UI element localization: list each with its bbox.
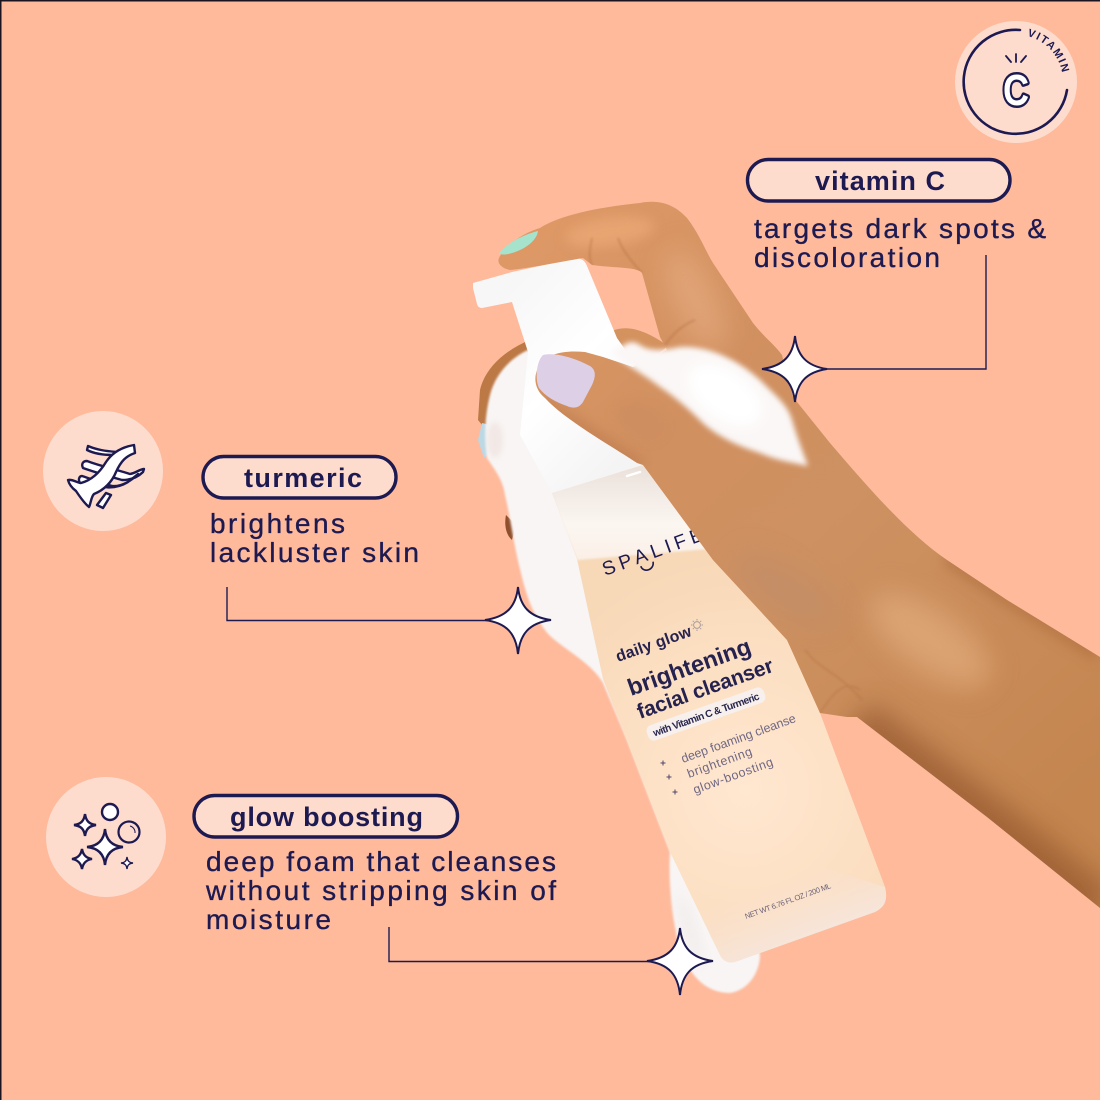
- connector line: turmeric: [227, 587, 490, 620]
- description: vitamin C: [754, 213, 1046, 273]
- glow boosting icon: [46, 777, 166, 897]
- label: facial cleanser: facial cleanser: [634, 654, 776, 724]
- foam inside bottle top: [552, 465, 706, 561]
- vitamin C badge icon: [955, 21, 1077, 143]
- badge label: vitamin: VITAMIN: [1030, 28, 1070, 72]
- pump: [473, 258, 643, 493]
- description: turmeric: [210, 508, 419, 568]
- turmeric icon: [43, 411, 163, 531]
- benefit list on bottle: [660, 711, 798, 797]
- sparkle marker: glow boosting: [647, 928, 713, 995]
- label: brightening: brightening: [624, 633, 754, 701]
- description: vitamin C: targets dark spots &: [754, 213, 1046, 244]
- foam on back of hand: [612, 342, 808, 466]
- callout: glow boosting: [194, 796, 556, 935]
- brand logo: SPALIFE: SPALIFE: [599, 524, 706, 581]
- net weight text: NET WT 6.76 FL OZ / 200 ML: [744, 881, 832, 921]
- description: glow boosting: without stripping skin of: [205, 875, 556, 906]
- pill heading: vitamin C: vitamin C: [815, 166, 945, 196]
- fingers behind the bottle: [478, 328, 668, 540]
- connector line: glow boosting: [389, 927, 655, 962]
- callout: turmeric: [203, 456, 419, 568]
- hand and arm: [498, 202, 1100, 910]
- sun icon: [691, 619, 703, 631]
- description: glow boosting: [205, 846, 556, 935]
- bottle: [545, 450, 886, 963]
- bottle body: [552, 465, 886, 963]
- benefit list on bottle: brightening: [685, 744, 754, 781]
- nail: mint: [499, 231, 538, 254]
- pill heading: turmeric: [203, 456, 396, 498]
- sparkle marker: vitamin C: [762, 336, 827, 402]
- benefit list on bottle: glow-boosting: [691, 755, 775, 797]
- description: glow boosting: moisture: [206, 904, 331, 935]
- pill heading: glow boosting: [194, 796, 458, 837]
- badge letter C: C: [1003, 66, 1029, 115]
- description: turmeric: brightens: [210, 508, 345, 539]
- foam running down the bottle: [485, 345, 760, 993]
- label: with Vitamin C and Turmeric: with Vitamin C & Turmeric: [651, 691, 761, 740]
- label: daily glow: daily glow: [614, 623, 694, 666]
- description: glow boosting: deep foam that cleanses: [206, 846, 556, 877]
- pill heading: turmeric: turmeric: [244, 463, 362, 493]
- pill heading: glow boosting: glow boosting: [230, 802, 423, 832]
- description: vitamin C: discoloration: [754, 242, 940, 273]
- skin shading: [540, 212, 1100, 910]
- benefit list on bottle: deep foaming cleanse: [679, 711, 798, 766]
- callout: vitamin C: [748, 160, 1046, 273]
- connector line: vitamin C: [820, 255, 986, 369]
- sparkle marker: turmeric: [485, 587, 551, 654]
- nail: lilac: [537, 354, 595, 408]
- description: turmeric: lackluster skin: [210, 537, 419, 568]
- pill heading: vitamin C: [748, 160, 1010, 201]
